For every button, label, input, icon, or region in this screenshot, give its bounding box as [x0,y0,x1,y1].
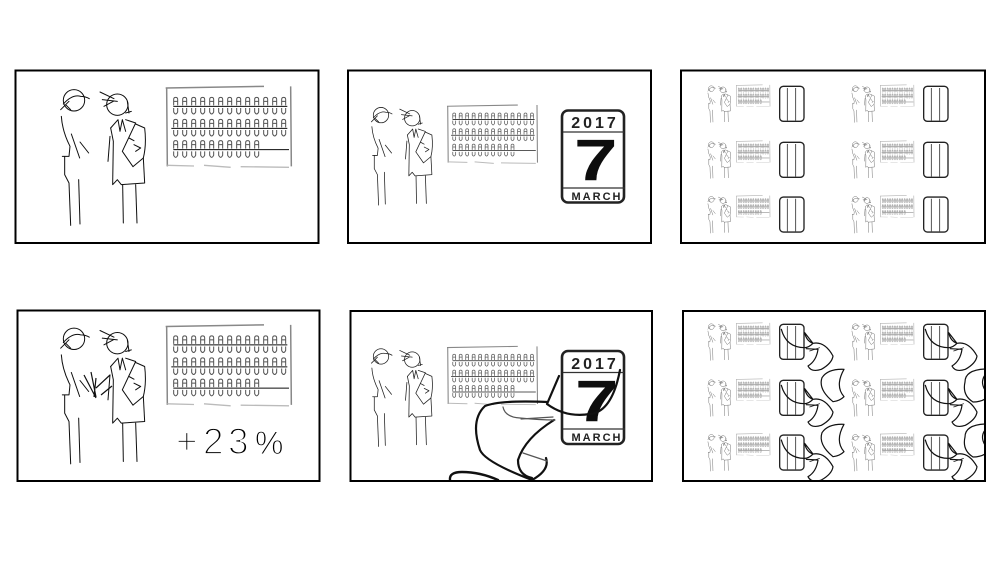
calendar 2017 7 March: 2017 [571,115,619,132]
paper ribbons [781,329,985,481]
men and abacus sketch [371,346,537,446]
small scene row 3 right [852,196,948,233]
calendar 2017 7 March: 7 [574,128,618,193]
small scene row 2 left [708,141,804,178]
panel frame [16,70,318,243]
calendar 2017 7 March: 7 [575,369,619,434]
calendar 2017 7 March: MARCH [572,191,622,203]
panel: men, abacus, calendar and paper ribbon [350,311,652,481]
growth figure +23%: +23% [176,421,283,462]
small scene row 3 right [852,434,948,471]
small scene row 3 left [708,196,804,233]
small scene row 2 left [708,379,804,416]
small scene row 1 right [852,323,948,360]
panel: six small scenes with ribbons [683,311,985,481]
panel frame [681,70,985,243]
panel frame [683,311,985,481]
small scene row 1 left [708,85,804,122]
men and abacus sketch [61,325,291,464]
calendar 2017 7 March: MARCH [572,432,622,444]
men and abacus sketch [61,86,291,225]
small scene row 1 left [708,323,804,360]
panel: six repeated small scenes [681,70,985,243]
handshake lines [84,372,112,398]
panel frame [350,311,652,481]
panel: men shaking hands and +23% [18,310,320,481]
panel: men, abacus and calendar [348,70,651,243]
small scene row 1 right [852,85,948,122]
men and abacus sketch [371,105,537,205]
small scene row 2 right [852,379,948,416]
panel frame [348,70,651,243]
calendar 2017 7 March [562,351,625,444]
calendar 2017 7 March [562,110,625,203]
calendar 2017 7 March: 2017 [571,356,619,373]
paper ribbon from calendar [450,370,620,480]
small scene row 2 right [852,141,948,178]
panel frame [18,310,320,481]
small scene row 3 left [708,434,804,471]
panel: two men and abacus board [16,70,318,243]
